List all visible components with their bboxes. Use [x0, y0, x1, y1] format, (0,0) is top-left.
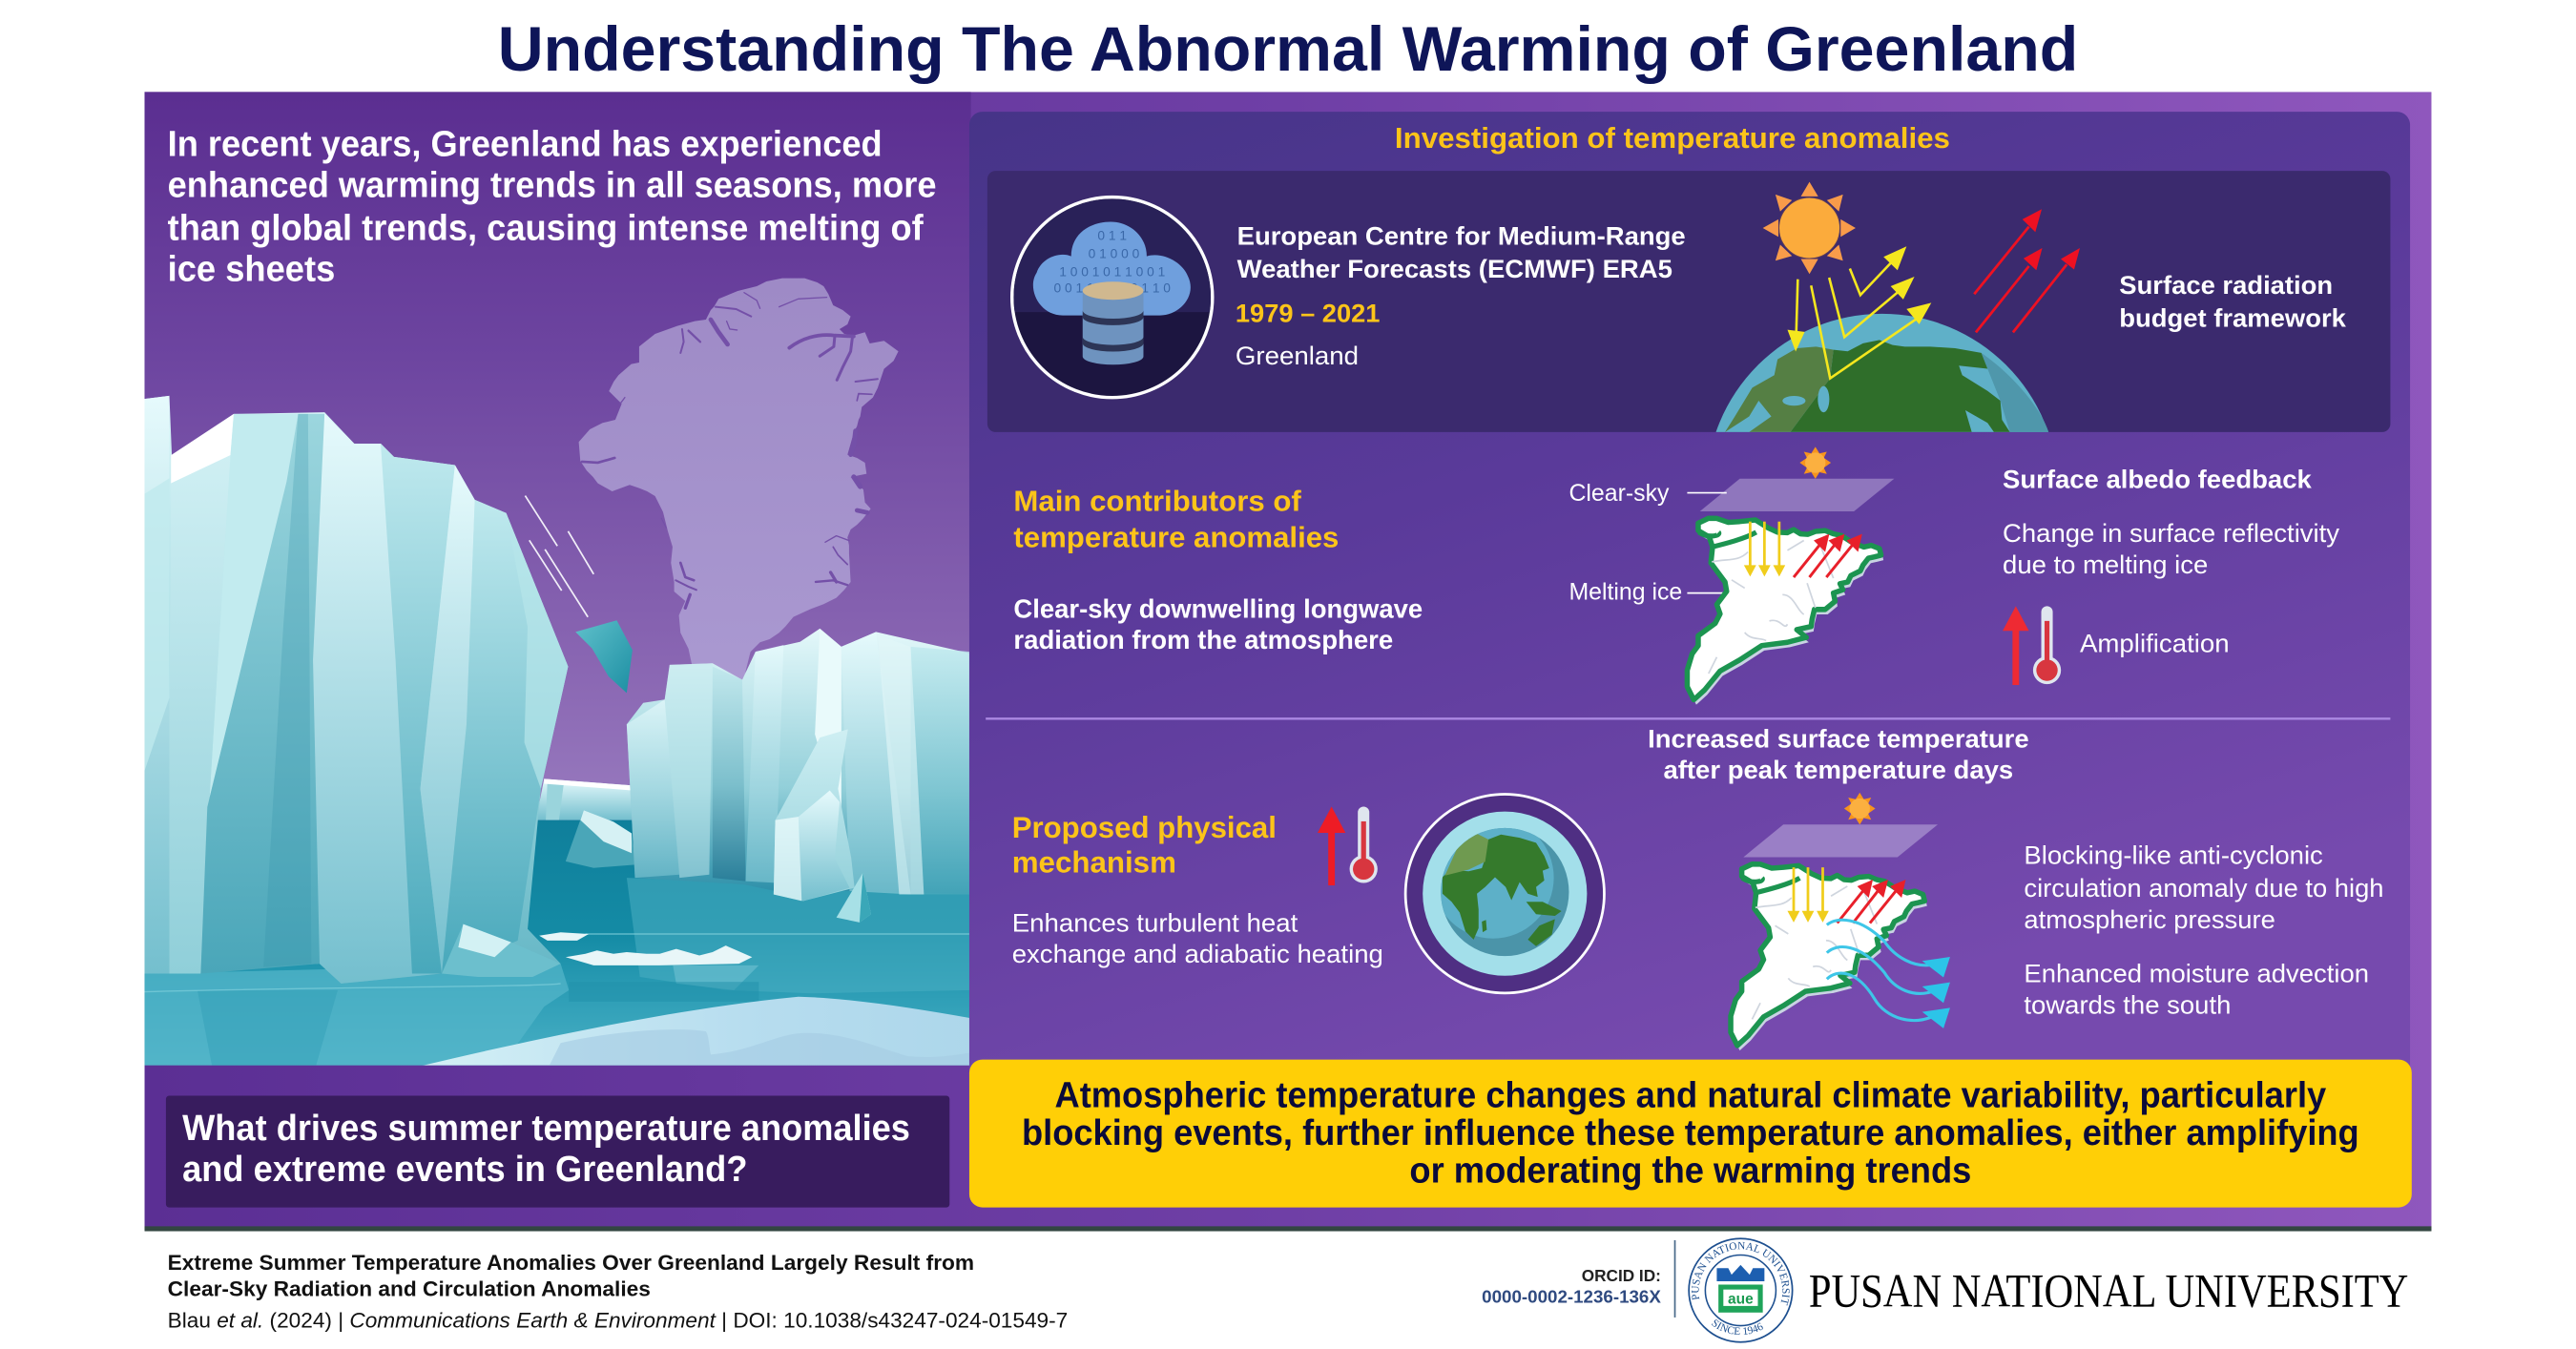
- sky: [145, 92, 971, 820]
- intro text: ice sheets: [168, 249, 335, 289]
- footer rule: [145, 1226, 2431, 1232]
- main purple background panel: [145, 92, 2431, 1231]
- motion lines: [525, 496, 593, 617]
- albedo feedback text: Amplification: [2080, 630, 2230, 658]
- data source text: 1979 – 2021: [1236, 299, 1381, 327]
- clear-sky plane: [1700, 479, 1894, 511]
- fjords: [582, 293, 878, 608]
- icon: warming arrow: [1318, 806, 1345, 885]
- small floating shard: [837, 873, 871, 923]
- Greenland map silhouette: [579, 279, 899, 687]
- main contributors text: [1013, 485, 1423, 654]
- divider: [986, 717, 2390, 719]
- intro text: than global trends, causing intense melting of: [168, 208, 924, 248]
- framework label: Surface radiation: [2119, 271, 2333, 300]
- rocky ice mound: [566, 810, 635, 868]
- title: Understanding The Abnormal Warming of Greenland: [498, 14, 2078, 85]
- university seal: aue: [1728, 1291, 1754, 1307]
- heading: investigation: Investigation of temperature anomalies: [1395, 121, 1950, 155]
- peak temperature heading: Increased surface temperature: [1648, 724, 2029, 753]
- conclusion box: or moderating the warming trends: [1409, 1152, 1971, 1192]
- front iceberg: [774, 729, 855, 901]
- main contributors text: radiation from the atmosphere: [1013, 625, 1393, 654]
- falling ice chunk: [575, 620, 633, 693]
- icon: amplification arrow: [2003, 606, 2029, 685]
- moisture arrows: [1827, 920, 1950, 1028]
- question box: What drives summer temperature anomalies: [182, 1109, 910, 1149]
- question box: and extreme events in Greenland?: [182, 1150, 747, 1190]
- right iceberg group: [627, 629, 990, 894]
- reflection bands in the water: [145, 878, 973, 1076]
- icon: thermometer: [2033, 606, 2061, 684]
- diagram: clear-sky over Greenland: [1568, 446, 1894, 705]
- citation: [168, 1251, 1068, 1332]
- warming map: [1731, 864, 1927, 1050]
- icon: cloud database: 1 0 0 1 0 1 1 0 0 1: [1059, 264, 1165, 279]
- conclusion box: blocking events, further influence these temperature anomalies, either amplifying: [1022, 1113, 2359, 1153]
- framework label: [2119, 271, 2346, 333]
- panel: investigation and contributors: [969, 112, 2410, 1081]
- framework label: budget framework: [2119, 304, 2346, 333]
- peak temperature heading: after peak temperature days: [1663, 756, 2013, 784]
- melting ice map: [1687, 518, 1883, 705]
- proposed mechanism text: Enhances turbulent heat: [1012, 908, 1298, 937]
- blocking and moisture text: towards the south: [2024, 990, 2231, 1019]
- foreground snow shelf: [379, 997, 990, 1076]
- icon: thermometer 2: [1350, 806, 1378, 883]
- question box: [166, 1095, 949, 1208]
- icon: earth with radiation arrows: [1706, 182, 2080, 665]
- panel: data and framework: [987, 171, 2390, 665]
- main contributors text: Clear-sky downwelling longwave: [1013, 593, 1423, 623]
- icon: cloud database: 0 0 1 1 0 0 0 0 1 1 0: [1054, 280, 1171, 295]
- citation: Extreme Summer Temperature Anomalies Over Greenland Largely Result from: [168, 1251, 974, 1275]
- icon: cloud database: 0 1 1: [1097, 228, 1127, 242]
- intro text: [168, 125, 937, 289]
- proposed mechanism text: Proposed physical: [1012, 810, 1277, 844]
- albedo feedback text: Change in surface reflectivity: [2003, 519, 2340, 548]
- diagram: clear-sky over Greenland: Melting ice: [1568, 578, 1682, 605]
- proposed mechanism text: mechanism: [1012, 844, 1176, 879]
- intro text: enhanced warming trends in all seasons, more: [168, 166, 937, 206]
- proposed mechanism text: [1012, 810, 1383, 968]
- yellow and red flux arrows: [1744, 522, 1862, 577]
- data source text: Greenland: [1236, 342, 1359, 370]
- university name: PUSAN NATIONAL UNIVERSITY: [1809, 1265, 2408, 1318]
- ORCID: ORCID ID:: [1582, 1266, 1661, 1285]
- albedo feedback text: due to melting ice: [2003, 550, 2208, 579]
- albedo feedback text: Surface albedo feedback: [2003, 465, 2312, 493]
- university seal: [1688, 1237, 1794, 1343]
- data source text: [1236, 222, 1686, 370]
- conclusion box: Atmospheric temperature changes and natural climate variability, particularly: [1054, 1076, 2326, 1116]
- blocking and moisture text: [2024, 841, 2384, 1019]
- citation: Clear-Sky Radiation and Circulation Anomalies: [168, 1277, 651, 1301]
- blocking and moisture text: atmospheric pressure: [2024, 905, 2275, 934]
- icon: cloud database: [1012, 197, 1213, 398]
- distant iceberg: [536, 778, 632, 820]
- data source text: Weather Forecasts (ECMWF) ERA5: [1237, 255, 1672, 283]
- diagram: blocking over Greenland: [1731, 793, 1950, 1050]
- blocking and moisture text: circulation anomaly due to high: [2024, 874, 2384, 903]
- main contributors text: temperature anomalies: [1013, 520, 1339, 553]
- icon: cloud database: 0 1 0 0 0: [1089, 246, 1140, 260]
- ORCID: 0000-0002-1236-136X: [1482, 1287, 1661, 1306]
- icon: small sun 2: [1844, 793, 1876, 824]
- data source text: European Centre for Medium-Range: [1237, 222, 1686, 251]
- proposed mechanism text: exchange and adiabatic heating: [1012, 940, 1383, 968]
- conclusion box: [969, 1060, 2412, 1208]
- clear-sky plane 2: [1743, 824, 1938, 857]
- logo divider: [1674, 1240, 1676, 1318]
- icon: cloud database: 0 1 1 0: [1092, 296, 1132, 310]
- university seal: PUSAN NATIONAL UNIVERSITY: [1691, 1242, 1790, 1305]
- icon: sun: [1763, 182, 1856, 274]
- diagram: clear-sky over Greenland: Clear-sky: [1568, 480, 1670, 507]
- blocking and moisture text: Enhanced moisture advection: [2024, 960, 2369, 988]
- icon: small sun: [1799, 446, 1831, 479]
- floating ice floes: [566, 945, 752, 965]
- citation: Blau et al. (2024) | Communications Earth & Environment | DOI: 10.1038/s43247-024-01549-7: [168, 1308, 1068, 1332]
- main contributors text: Main contributors of: [1013, 485, 1301, 518]
- intro text: In recent years, Greenland has experienced: [168, 125, 883, 165]
- panel: left illustration of icebergs: [132, 82, 990, 1076]
- blocking and moisture text: Blocking-like anti-cyclonic: [2024, 841, 2323, 870]
- icon: globe: [1405, 795, 1604, 993]
- albedo feedback text: [2003, 465, 2340, 658]
- large left iceberg: [143, 396, 568, 984]
- university seal: SINCE 1946: [1712, 1319, 1763, 1336]
- water: [132, 820, 990, 1076]
- ice chunks at left berg foot: [442, 924, 561, 977]
- ORCID: [1482, 1266, 1661, 1306]
- peak temperature heading: [1648, 724, 2029, 784]
